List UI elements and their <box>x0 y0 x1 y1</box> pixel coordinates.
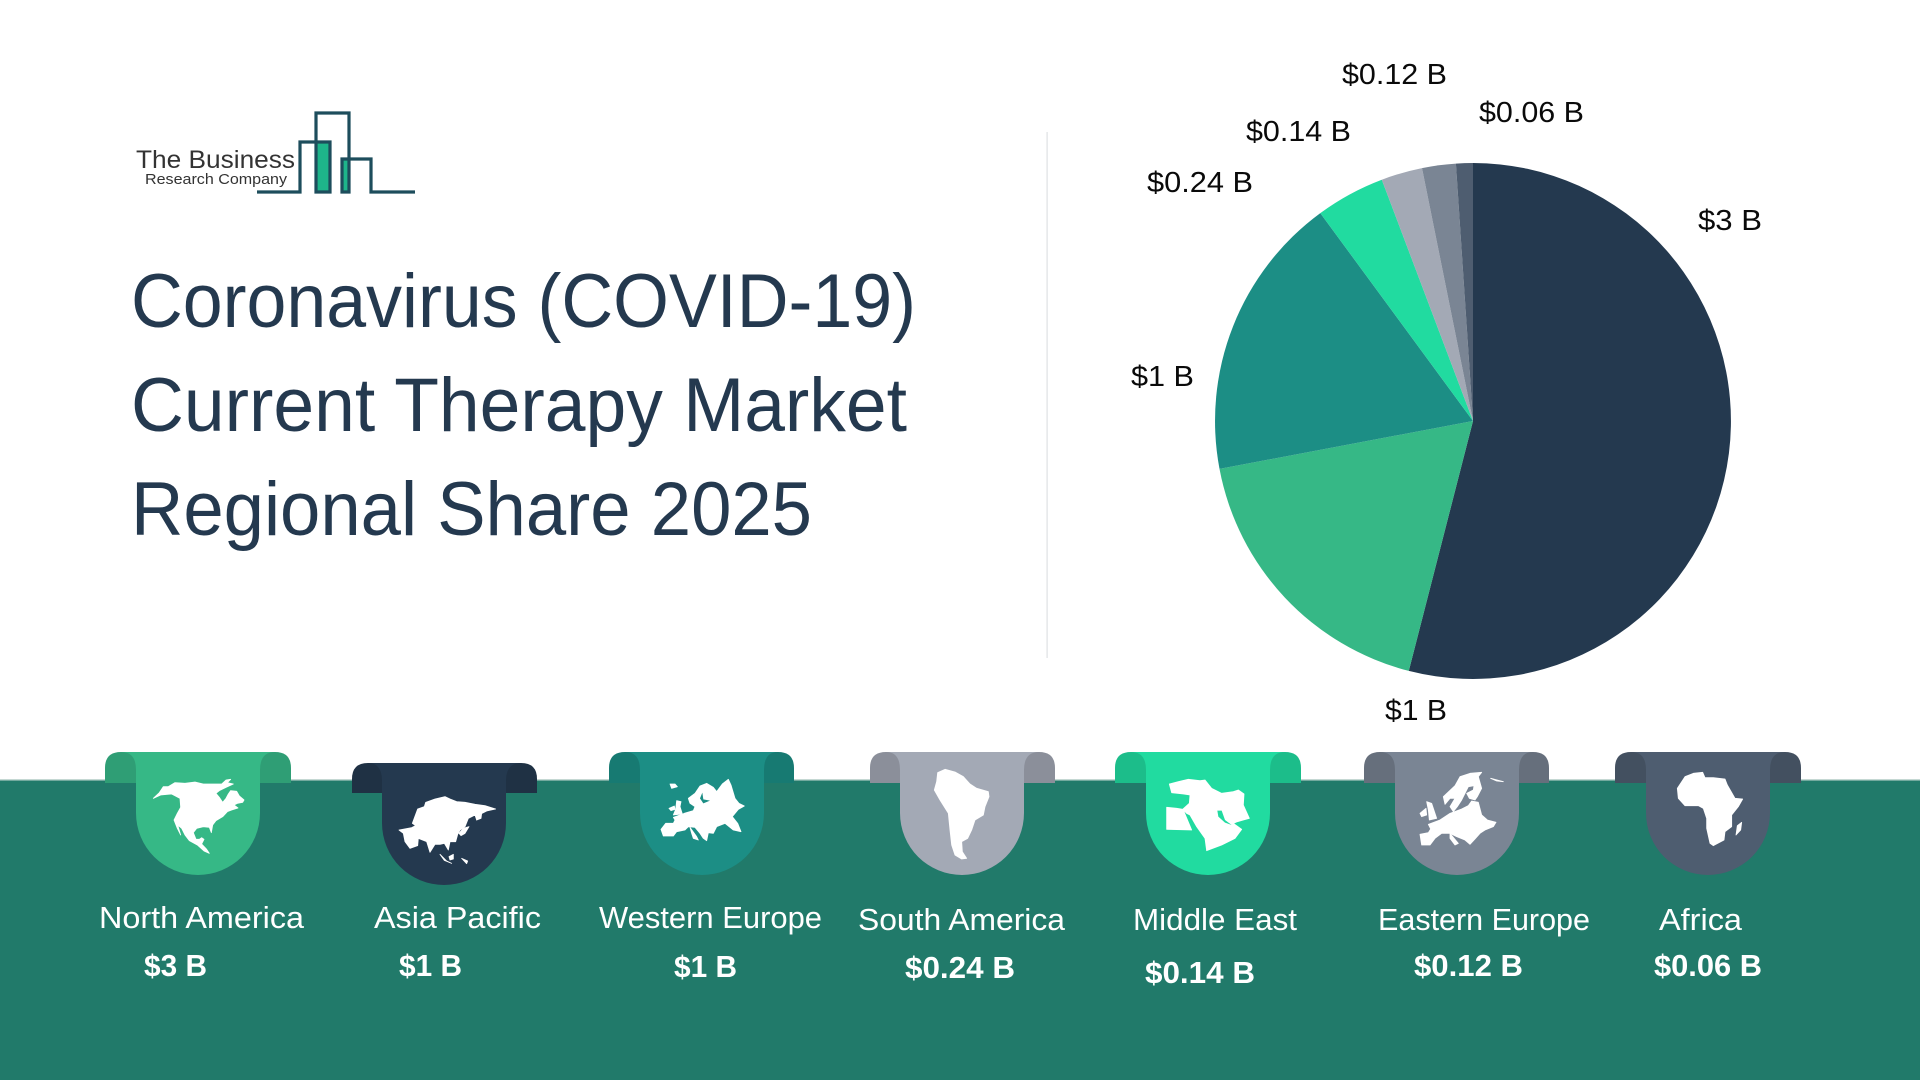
pie labels: $1 B <box>1385 695 1447 727</box>
ribbon: Africa <box>1615 752 1801 875</box>
label: Middle East: Middle East <box>1133 902 1297 937</box>
value: Eastern Europe: $0.12 B <box>1414 948 1523 983</box>
icon: Western Europe map <box>661 779 744 841</box>
region: Middle East <box>1115 752 1301 990</box>
pie labels <box>1131 59 1762 727</box>
label: Asia Pacific: Asia Pacific <box>374 900 541 935</box>
value: North America: $3 B <box>144 948 207 983</box>
region: Africa <box>1615 752 1801 983</box>
pie labels: $0.06 B <box>1479 97 1584 129</box>
logo: The Business Research Company: The Business <box>136 146 295 174</box>
value: Middle East: $0.14 B <box>1145 955 1255 990</box>
region: South America <box>858 752 1066 985</box>
pie labels: $0.14 B <box>1246 116 1351 148</box>
label: Africa: Africa <box>1659 902 1743 937</box>
label: Eastern Europe: Eastern Europe <box>1378 902 1590 937</box>
ribbon: North America <box>105 752 291 875</box>
title <box>131 259 916 552</box>
pie labels: $0.12 B <box>1342 59 1447 91</box>
pie chart: regional share <box>1215 163 1731 679</box>
pie labels: $0.24 B <box>1147 167 1253 199</box>
label: Western Europe: Western Europe <box>599 900 822 935</box>
title: Coronavirus (COVID-19) <box>131 259 916 344</box>
region: Asia Pacific <box>352 763 541 983</box>
title: Regional Share 2025 <box>131 467 812 552</box>
ribbon: South America <box>870 752 1055 875</box>
value: Asia Pacific: $1 B <box>399 948 462 983</box>
value: Western Europe: $1 B <box>674 949 737 984</box>
ribbon: Western Europe <box>609 752 794 875</box>
logo: The Business Research Company <box>136 113 415 192</box>
bottom band <box>0 779 1920 1080</box>
icon: Middle East map <box>1167 779 1249 851</box>
pie labels: $1 B <box>1131 361 1194 393</box>
value: South America: $0.24 B <box>905 950 1015 985</box>
region: Eastern Europe <box>1364 752 1590 983</box>
value: Africa: $0.06 B <box>1654 948 1762 983</box>
label: South America: South America <box>858 902 1066 937</box>
ribbon: Eastern Europe <box>1364 752 1549 875</box>
icon: North America map <box>153 779 244 853</box>
ribbon: Asia Pacific <box>352 763 537 885</box>
region: North America <box>99 752 305 983</box>
icon: Asia map <box>399 797 496 864</box>
title: Current Therapy Market <box>131 363 907 448</box>
region: Western Europe <box>599 752 822 984</box>
icon: South America map <box>934 769 989 859</box>
icon: Eastern Europe map <box>1420 772 1503 845</box>
pie labels: $3 B <box>1698 205 1762 237</box>
icon: Africa map <box>1677 772 1743 846</box>
label: North America: North America <box>99 900 305 935</box>
ribbon: Middle East <box>1115 752 1301 875</box>
logo: The Business Research Company: Research Company <box>145 171 288 188</box>
